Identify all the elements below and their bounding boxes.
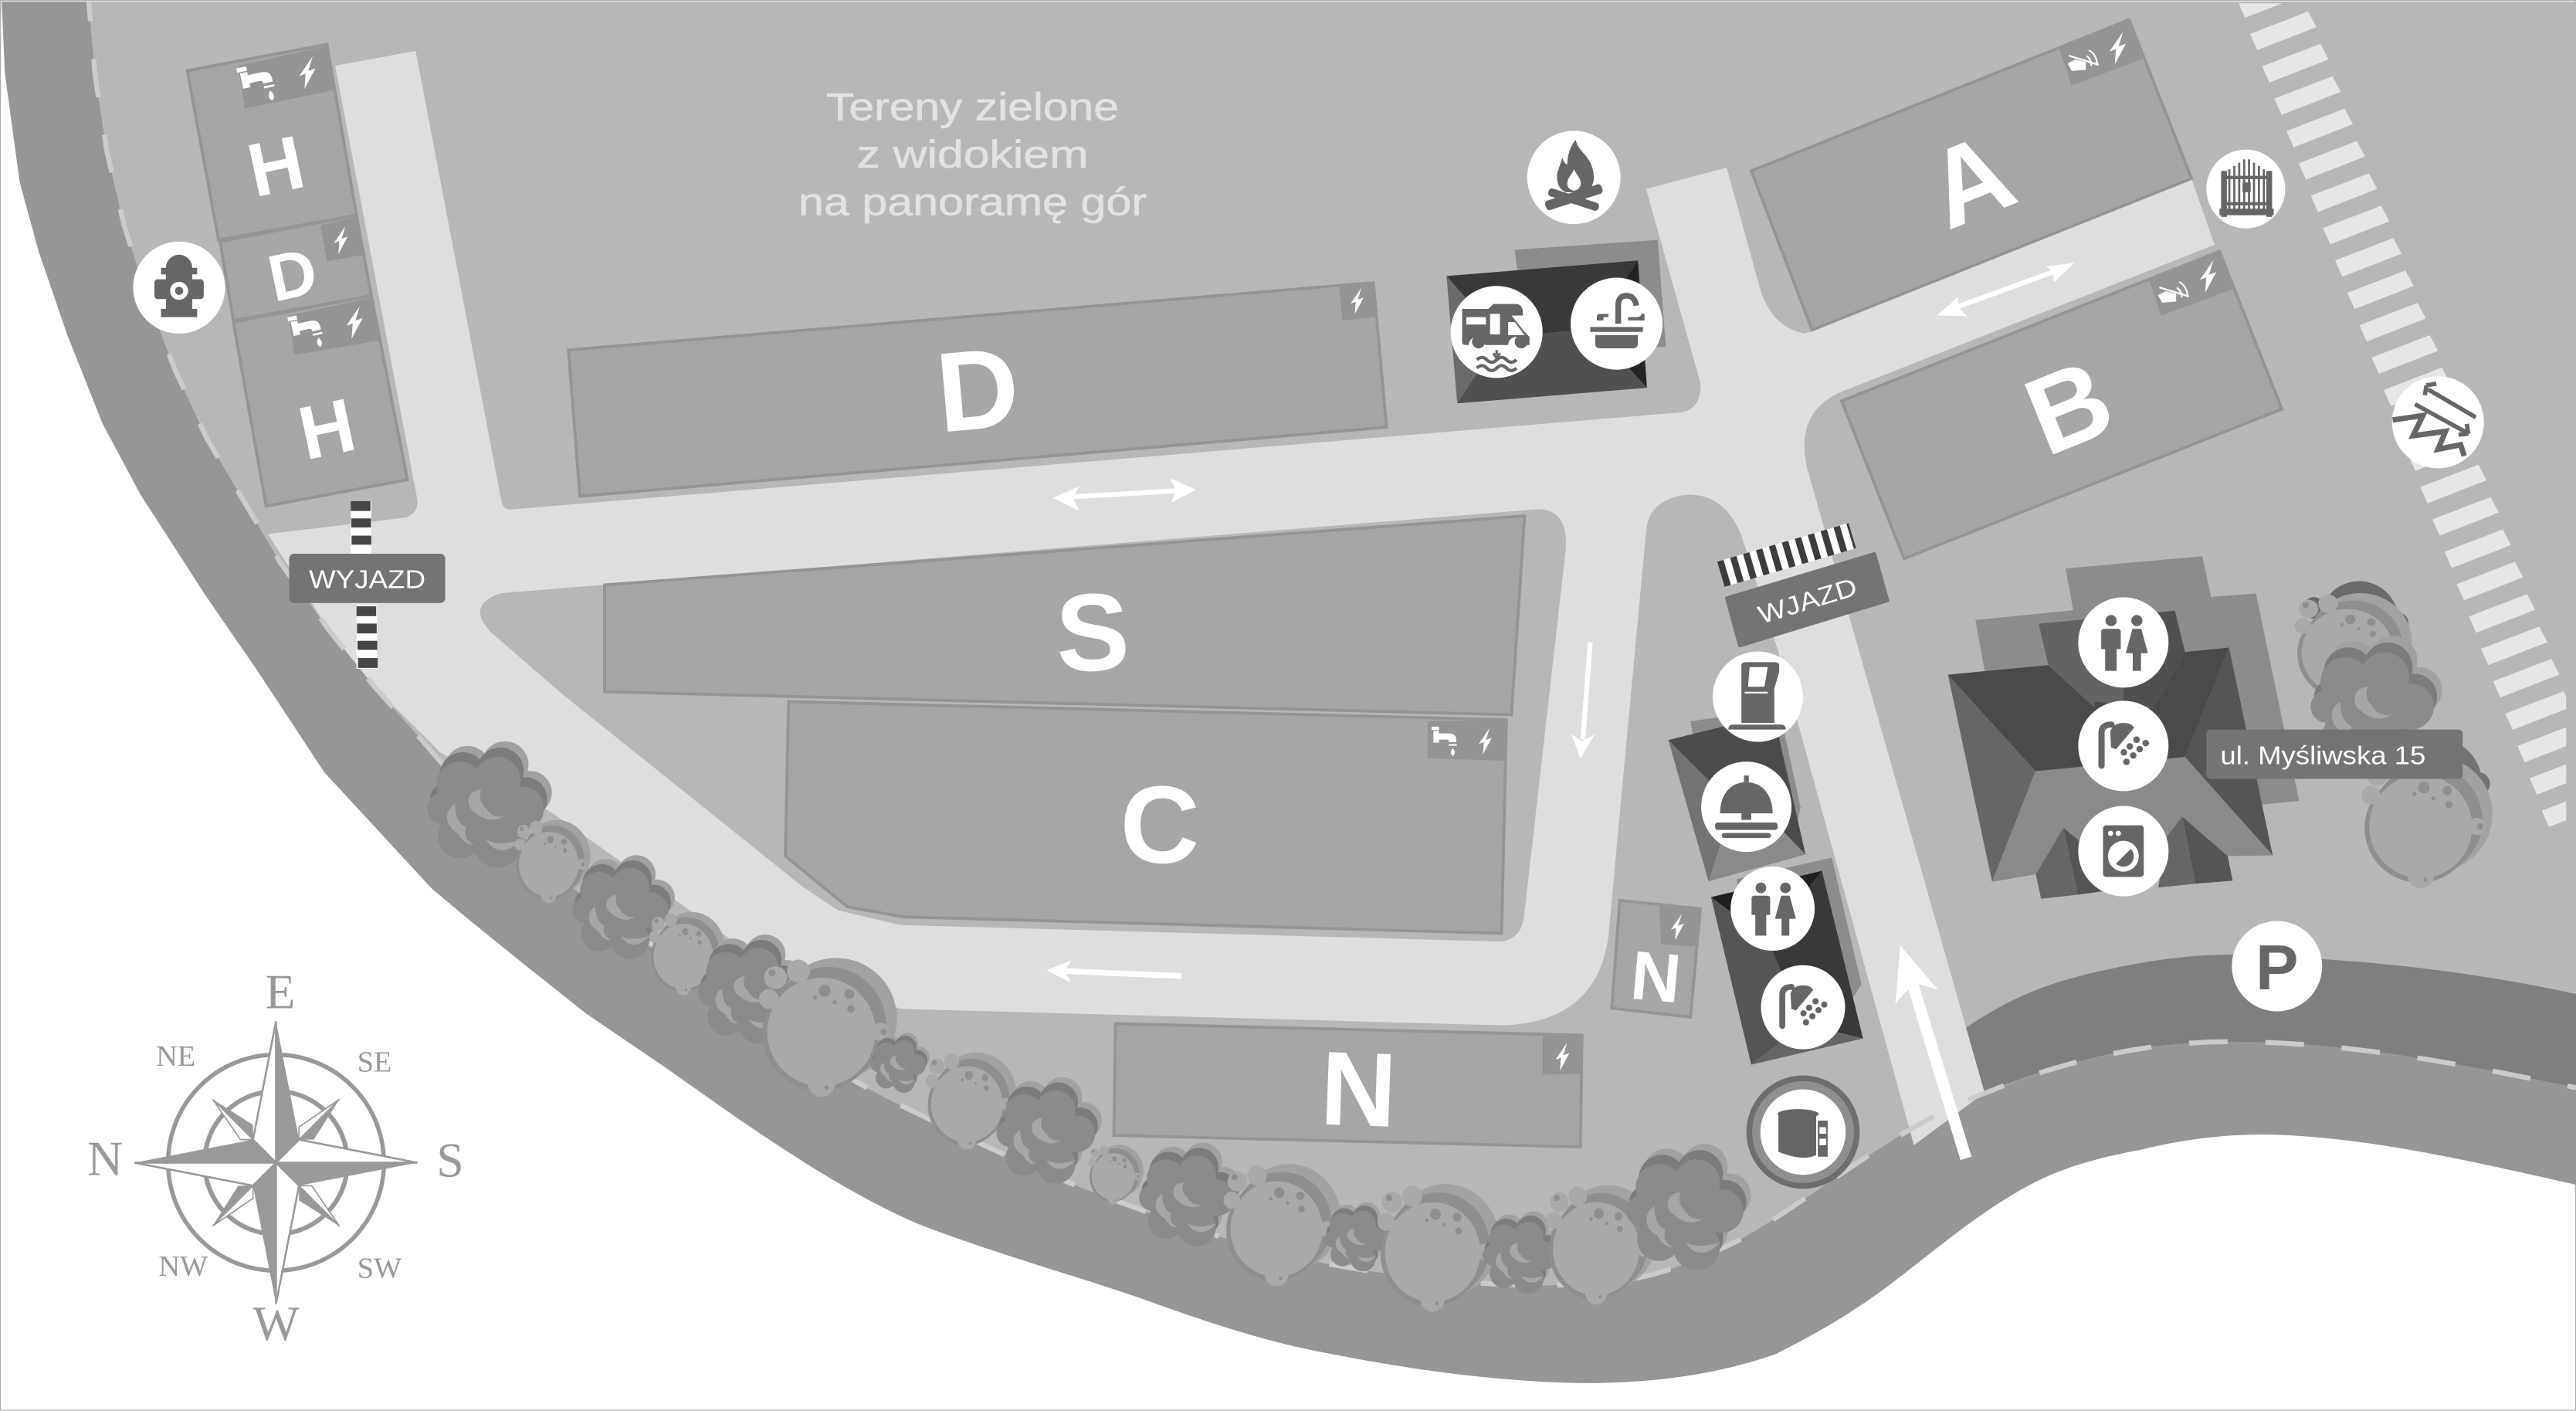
trees near main building	[2295, 582, 2493, 888]
entry sign	[1727, 554, 1888, 646]
parcel S	[605, 516, 1524, 714]
green island	[480, 509, 1566, 941]
parcel N small	[1612, 901, 1700, 1017]
compass rose: SE	[358, 1046, 391, 1078]
parcel C: C	[1119, 763, 1201, 887]
exit sign	[289, 554, 446, 603]
parcel A	[1751, 20, 2191, 330]
entry crossing	[1721, 536, 1852, 575]
icon: parking: P	[2256, 931, 2298, 1003]
exit sign: WYJAZD	[309, 565, 425, 594]
building: main sanitary	[1948, 556, 2299, 899]
parcels H D H: D	[262, 235, 324, 316]
compass rose: E	[265, 964, 295, 1019]
icon: kiosk	[1713, 652, 1803, 742]
compass rose: SW	[358, 1252, 402, 1284]
building: sanitary small	[1711, 858, 1863, 1065]
icon: camper water	[1451, 286, 1543, 378]
building: camper service	[1446, 240, 1666, 403]
title: green areas note: z widokiem	[857, 133, 1089, 176]
title: green areas note: Tereny zielone	[826, 85, 1119, 128]
arrow: down	[1571, 643, 1595, 758]
parcel N small: N	[1628, 936, 1684, 1017]
parcel S: S	[1054, 570, 1131, 696]
icon: hydrant	[133, 242, 225, 334]
icon: gate	[2206, 150, 2285, 229]
trees along road	[427, 741, 1751, 1311]
building: reception	[1669, 708, 1805, 881]
icon: water tank	[1747, 1075, 1859, 1189]
address label	[2206, 730, 2462, 778]
roads network	[268, 51, 2215, 1145]
arrow: two-way between A and B	[1937, 263, 2074, 317]
parking strip	[1965, 955, 2576, 1093]
icon: sink	[1571, 278, 1663, 370]
icon: stairs	[2392, 376, 2484, 468]
parcel B	[1842, 252, 2282, 558]
parcels H D H: H	[240, 119, 311, 213]
icon: parking	[2232, 921, 2322, 1011]
parcel N large	[1113, 1023, 1582, 1149]
icon: toilets small	[1730, 867, 1815, 951]
compass rose: S	[436, 1133, 464, 1188]
icon: shower	[2078, 700, 2168, 791]
icon: campfire	[1527, 131, 1621, 224]
parcels H D H	[188, 44, 408, 506]
parcel A: A	[1910, 109, 2030, 253]
compass rose: NW	[158, 1250, 208, 1283]
parcel D	[568, 283, 1387, 497]
parcel B: B	[2009, 336, 2129, 480]
icon: shower small	[1761, 965, 1845, 1050]
parcel N large: N	[1319, 1029, 1398, 1149]
pedestrian crossing stripes	[2238, 0, 2576, 827]
entry sign: WJAZD	[1754, 572, 1860, 629]
exit crossing	[351, 501, 378, 669]
compass rose	[87, 964, 464, 1351]
compass rose: W	[253, 1296, 300, 1351]
parcel D: D	[931, 324, 1024, 457]
arrow: two-way main road	[1053, 478, 1196, 511]
address label: ul. Myśliwska 15	[2220, 741, 2425, 770]
compass rose: NE	[156, 1040, 195, 1073]
icon: toilets	[2078, 597, 2168, 687]
parcel C	[785, 701, 1507, 933]
parcels H D H: H	[291, 382, 362, 476]
icon: washing machine	[2078, 806, 2168, 897]
arrow: entry up	[1896, 945, 1966, 1158]
arrow: left	[1046, 961, 1181, 982]
title: green areas note	[798, 85, 1147, 224]
title: green areas note: na panoramę gór	[798, 181, 1147, 224]
compass rose: N	[87, 1131, 123, 1185]
icon: reception bell	[1701, 761, 1791, 852]
